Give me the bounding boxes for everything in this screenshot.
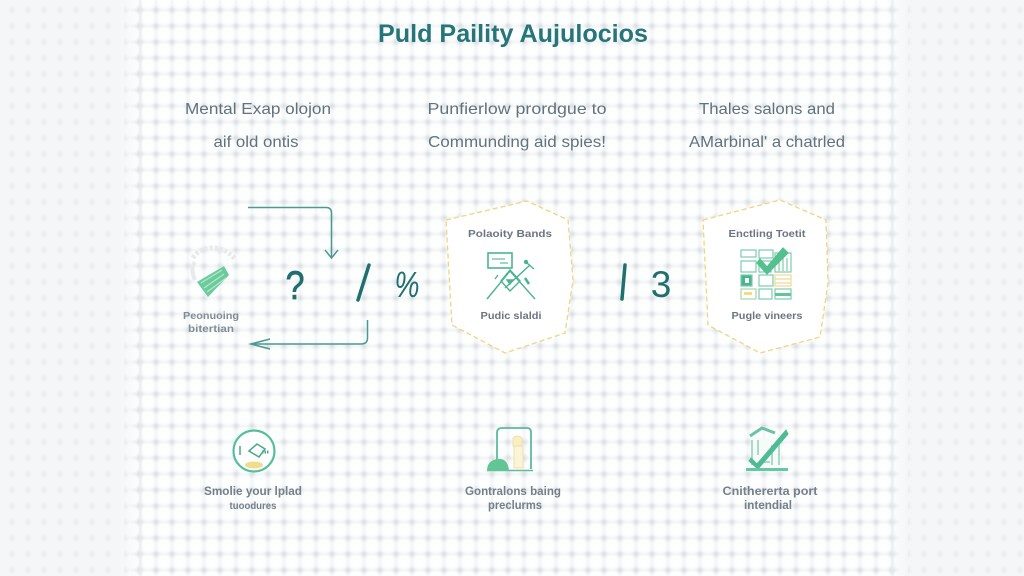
symbol: number three: 3 [651, 264, 671, 305]
column 3 intro text: AMarbinal' a chatrled [689, 134, 845, 151]
symbol: percent: % [394, 264, 420, 305]
icon label: left: bitertian [188, 323, 234, 335]
icon: checklist grid [741, 248, 791, 299]
middle panel heading: Polaoity Bands [468, 228, 552, 240]
panel: right hexagon [703, 200, 828, 353]
symbol: slash two [622, 265, 625, 299]
column 3 intro text: Thales salons and [699, 101, 835, 118]
arrow: top loop [248, 208, 338, 258]
column 1 intro text: aif old ontis [214, 134, 298, 151]
bottom label: right: Cnithererta port [722, 486, 818, 498]
title: Puld Paility Aujulocios [378, 20, 648, 48]
icon: circle badge [234, 430, 274, 472]
icon: frame with tower [487, 428, 533, 471]
bottom label: right: intendial [744, 500, 792, 512]
column 3 intro text [689, 101, 845, 151]
column 2 intro text [428, 101, 607, 151]
bottom label: left: Smolie your lplad [204, 486, 302, 498]
bottom label: middle: Gontralons baing [465, 486, 561, 498]
icon: green card with sparkle ring [192, 248, 235, 297]
bottom label: middle [465, 486, 561, 512]
bottom label: left: tuoodures [230, 500, 277, 512]
right panel heading: Enctling Toetit [728, 228, 806, 240]
column 1 intro text: Mental Exap olojon [185, 101, 331, 118]
right panel caption: Pugle vineers [732, 310, 803, 322]
bottom label: right [722, 486, 818, 512]
bottom label: left [204, 486, 302, 512]
panel: middle hexagon [446, 201, 573, 353]
column 1 intro text [185, 101, 331, 151]
column 2 intro text: Communding aid spies! [428, 134, 606, 151]
icon: crossed tools with card [487, 253, 535, 299]
middle panel caption: Pudic slaldi [480, 310, 542, 322]
symbol: slash [358, 265, 369, 300]
column 2 intro text: Punfierlow prordgue to [428, 101, 607, 118]
bottom label: middle: preclurms [488, 500, 542, 512]
arrow: bottom loop [251, 320, 368, 349]
icon: chart with tick [746, 428, 788, 471]
icon label: left [183, 310, 239, 335]
icon label: left: Peonuoing [183, 310, 239, 322]
symbol: question mark: ? [286, 264, 304, 308]
